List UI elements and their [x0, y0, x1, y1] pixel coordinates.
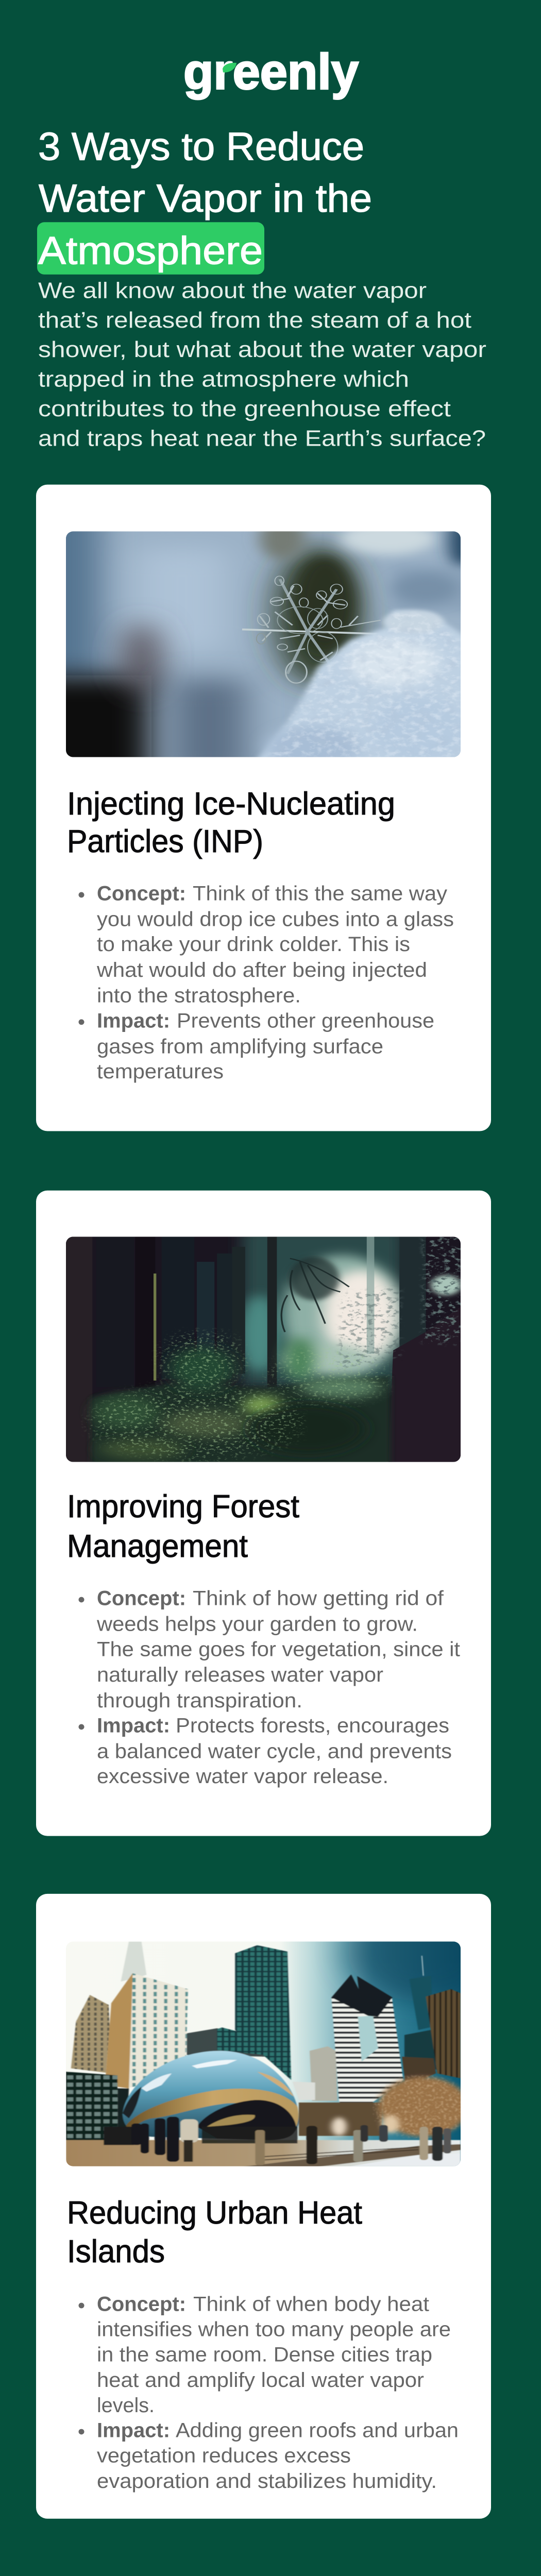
- intro text: [38, 278, 486, 451]
- bullet list: into the stratosphere.: [97, 984, 301, 1007]
- intro text: shower, but what about the water vapor: [38, 337, 486, 362]
- snowflake crystal: [242, 576, 381, 683]
- sculpture: [123, 2051, 299, 2140]
- heading: Management: [67, 1529, 248, 1564]
- ground: [66, 2140, 461, 2167]
- low dark building: [66, 2072, 117, 2143]
- left towers: [71, 1942, 291, 2088]
- highlight: Atmosphere: Atmosphere: [38, 229, 263, 273]
- title: 3 Ways to Reduce: [38, 125, 364, 168]
- intro text: contributes to the greenhouse effect: [38, 396, 451, 421]
- photo: snowflake: [66, 531, 461, 757]
- bullet list: Prevents other greenhouse: [177, 1009, 434, 1032]
- bullet list: Protects forests, encourages: [176, 1714, 449, 1737]
- bullet list: [78, 882, 454, 1083]
- bullet list: excessive water vapor release.: [97, 1765, 388, 1788]
- bullet list: temperatures: [97, 1060, 224, 1083]
- bullet list: weeds helps your garden to grow.: [96, 1612, 418, 1635]
- bullet list: vegetation reduces excess: [97, 2444, 351, 2467]
- bullet list: you would drop ice cubes into a glass: [97, 907, 454, 930]
- bullet list: levels.: [97, 2393, 155, 2417]
- title: Water Vapor in the: [39, 177, 372, 221]
- bullet list: Impact:: [97, 2418, 170, 2442]
- bullet list: Adding green roofs and urban: [176, 2418, 459, 2442]
- intro text: trapped in the atmosphere which: [38, 367, 409, 392]
- bullet list: Think of when body heat: [193, 2292, 429, 2316]
- panel: injecting ice-nucleating particles: [0, 485, 491, 1131]
- logo: greenly: greenly: [183, 44, 359, 99]
- heading: Injecting Ice-Nucleating: [67, 786, 395, 822]
- photo: city skyline and reflective sculpture: [66, 1941, 461, 2166]
- heading: Reducing Urban Heat: [67, 2195, 362, 2231]
- bullet list: Concept:: [97, 2292, 186, 2316]
- bullet list: Think of this the same way: [193, 882, 448, 905]
- bullet list: [78, 2292, 459, 2493]
- bullet list: gases from amplifying surface: [97, 1035, 383, 1058]
- bullet list: in the same room. Dense cities trap: [97, 2343, 432, 2366]
- heading: [67, 786, 395, 859]
- bullet list: [78, 1586, 460, 1788]
- hanging branches: [281, 1259, 349, 1332]
- bullet list: The same goes for vegetation, since it: [97, 1637, 460, 1660]
- bullet list: Impact:: [97, 1714, 170, 1737]
- dark foliage: [330, 1236, 461, 1374]
- intro text: and traps heat near the Earth’s surface?: [38, 426, 486, 451]
- intro text: that’s released from the steam of a hot: [38, 308, 472, 333]
- panel: improving forest management: [36, 1191, 491, 1836]
- bullet list: evaporation and stabilizes humidity.: [97, 2469, 437, 2493]
- bullet list: Concept:: [97, 1586, 186, 1610]
- panel: reducing urban heat islands: [36, 1894, 499, 2519]
- heading: Islands: [67, 2234, 165, 2269]
- visitors: [104, 2116, 451, 2165]
- heading: [67, 2195, 362, 2269]
- bullet list: a balanced water cycle, and prevents: [97, 1739, 452, 1762]
- heading: Improving Forest: [67, 1489, 299, 1524]
- snow drift: [256, 572, 461, 757]
- heading: Particles (INP): [67, 824, 263, 859]
- heading: [67, 1489, 299, 1564]
- bullet list: intensifies when too many people are: [97, 2317, 451, 2341]
- bullet list: through transpiration.: [97, 1688, 302, 1712]
- forest floor: [81, 1327, 393, 1471]
- bullet list: to make your drink colder. This is: [97, 933, 410, 956]
- bullet list: naturally releases water vapor: [97, 1663, 383, 1686]
- icon: green leaf: [223, 63, 236, 73]
- title: [37, 125, 372, 275]
- trunks: [66, 1236, 474, 1471]
- bullet list: Think of how getting rid of: [193, 1586, 444, 1610]
- photo: misty forest: [66, 1230, 474, 1471]
- trees: [299, 2075, 469, 2139]
- bullet list: Impact:: [97, 1009, 170, 1032]
- right towers: [293, 1956, 461, 2115]
- bullet list: what would do after being injected: [96, 958, 427, 981]
- bullet list: heat and amplify local water vapor: [97, 2368, 424, 2392]
- bullet list: Concept:: [97, 882, 186, 905]
- intro text: We all know about the water vapor: [38, 278, 427, 303]
